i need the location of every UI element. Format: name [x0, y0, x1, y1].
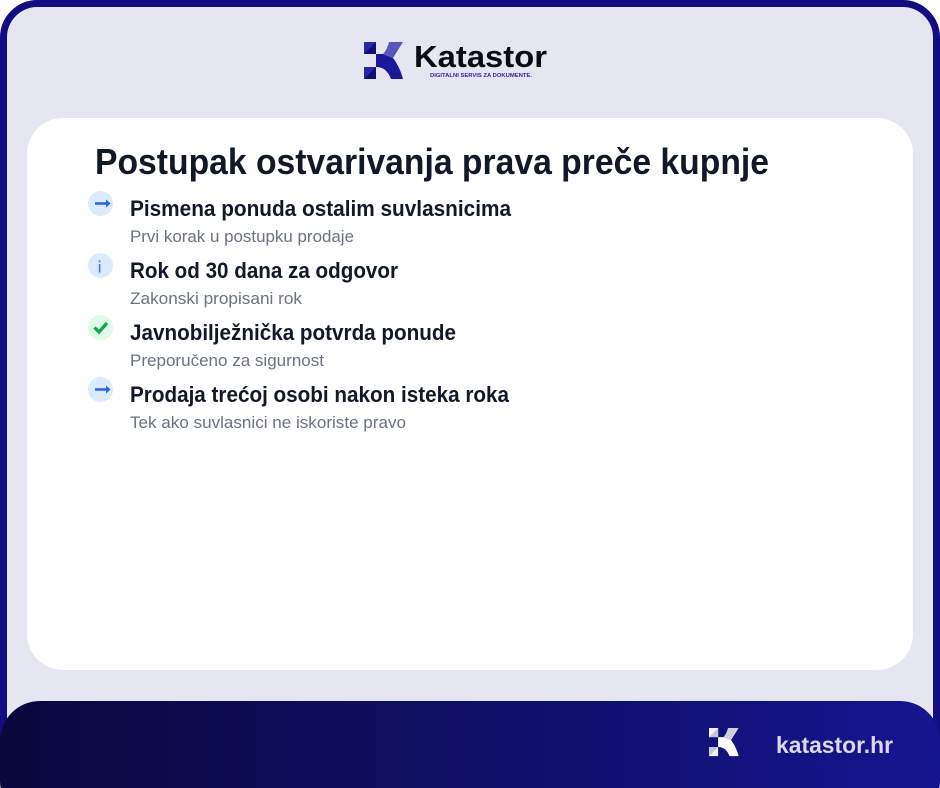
- step 1: [88, 191, 512, 246]
- title: Postupak ostvarivanja prava preče kupnje: [95, 141, 769, 182]
- step 3 heading: Javnobilježnička potvrda ponude: [130, 320, 456, 345]
- step 3: [88, 315, 456, 370]
- icon: arrow: [88, 377, 113, 402]
- logo tagline: DIGITALNI SERVIS ZA DOKUMENTE.: [430, 73, 532, 79]
- logo wordmark: Katastor: [414, 39, 547, 74]
- footer bar: [0, 701, 940, 788]
- logo mark: [364, 42, 403, 79]
- icon: info: [88, 253, 113, 278]
- footer logo icon: [709, 728, 739, 756]
- step 4 description: Tek ako suvlasnici ne iskoriste pravo: [130, 414, 406, 432]
- step 1 heading: Pismena ponuda ostalim suvlasnicima: [130, 196, 512, 221]
- step 2 heading: Rok od 30 dana za odgovor: [130, 258, 398, 283]
- step 2 description: Zakonski propisani rok: [130, 290, 303, 308]
- step 2: [88, 253, 398, 308]
- step 1 description: Prvi korak u postupku prodaje: [130, 228, 354, 246]
- icon: arrow: [88, 191, 113, 216]
- step 4: [88, 377, 510, 432]
- step 3 description: Preporučeno za sigurnost: [130, 352, 324, 370]
- footer url: katastor.hr: [776, 732, 893, 758]
- header logo: [364, 39, 547, 79]
- icon: check: [88, 315, 113, 340]
- step 4 heading: Prodaja trećoj osobi nakon isteka roka: [130, 382, 510, 407]
- content panel: [27, 118, 913, 670]
